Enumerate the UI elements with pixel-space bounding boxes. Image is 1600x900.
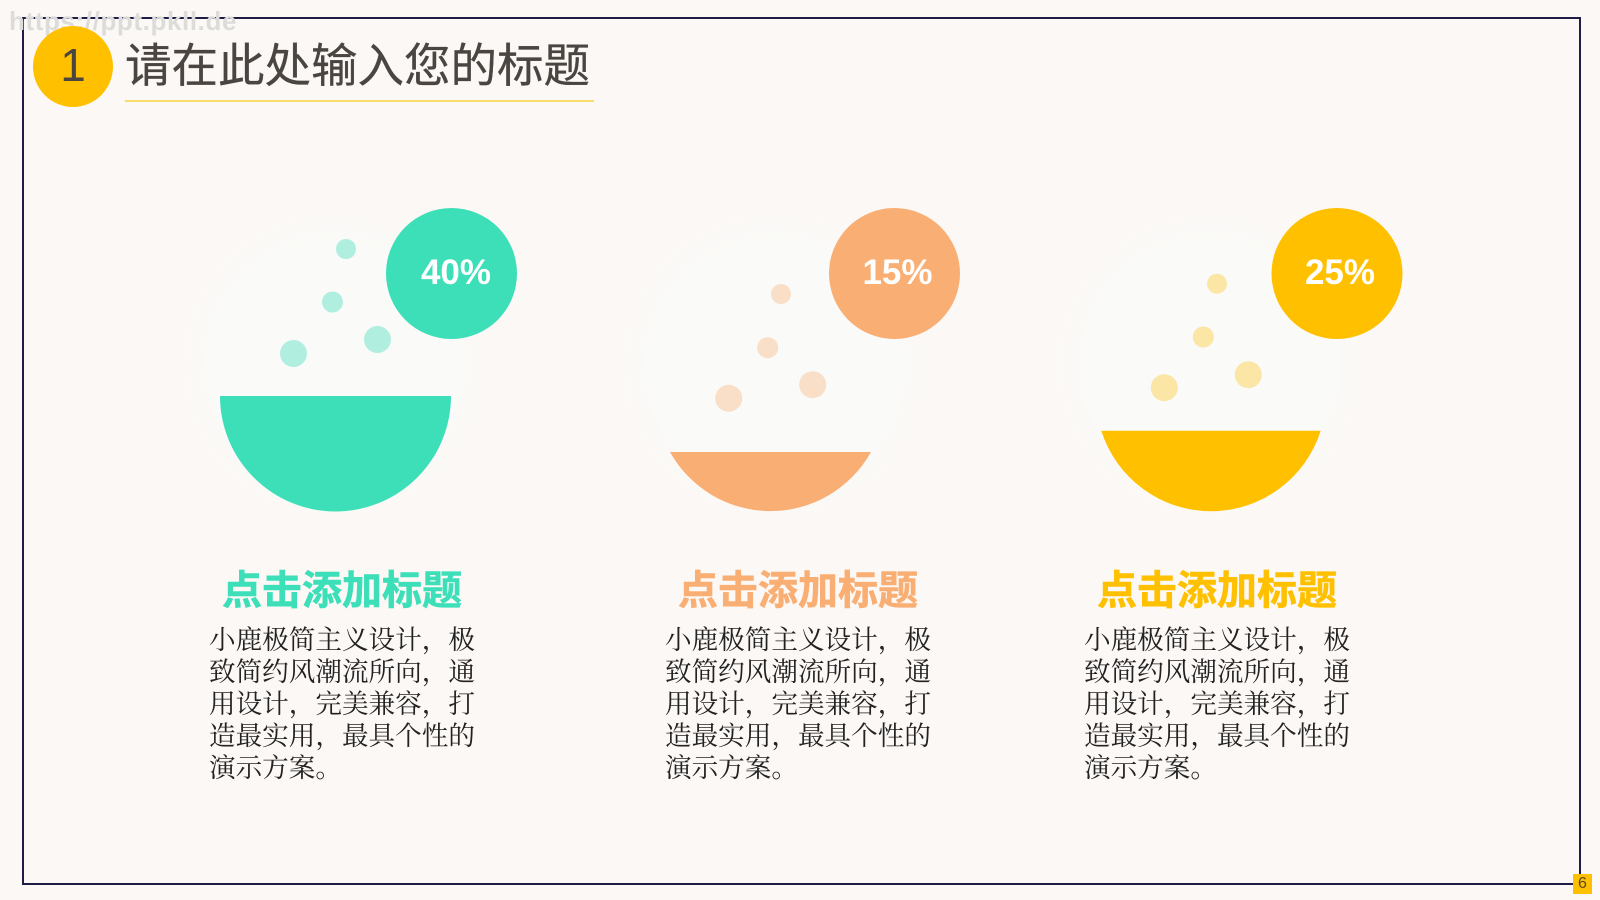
title underline xyxy=(125,100,594,102)
body text column 2: 造最实用，最具个性的 xyxy=(665,721,931,751)
body text column 1: 致简约风潮流所向，通 xyxy=(209,657,475,687)
body text column 1: 小鹿极简主义设计，极 xyxy=(209,625,475,655)
body text column 3: 致简约风潮流所向，通 xyxy=(1084,657,1350,687)
body text column 3: 造最实用，最具个性的 xyxy=(1084,721,1350,751)
body text column 3: 小鹿极简主义设计，极 xyxy=(1084,625,1350,655)
body text column 1: 用设计，完美兼容，打 xyxy=(209,689,475,719)
body text column 2: 小鹿极简主义设计，极 xyxy=(665,625,931,655)
heading column 3: 点击添加标题 xyxy=(1097,569,1337,613)
bowl chart 1: 40%: 40% xyxy=(421,253,491,292)
number badge xyxy=(33,26,113,107)
body text column 3: 用设计，完美兼容，打 xyxy=(1084,689,1350,719)
bowl chart 3: 25%: 25% xyxy=(1305,253,1375,292)
body text column 2: 演示方案。 xyxy=(665,753,798,783)
watermark: https://ppt.pkll.de xyxy=(9,6,237,36)
body text column 1 xyxy=(209,625,475,783)
bowl chart 2: 15%: 15% xyxy=(862,253,933,292)
body text column 1: 造最实用，最具个性的 xyxy=(209,721,475,751)
body text column 3: 演示方案。 xyxy=(1084,753,1217,783)
bowl chart 3: 25% xyxy=(1101,208,1402,511)
body text column 2: 致简约风潮流所向，通 xyxy=(665,657,931,687)
heading column 1: 点击添加标题 xyxy=(222,569,462,613)
page number: 6 xyxy=(1578,875,1587,892)
body text column 2: 用设计，完美兼容，打 xyxy=(665,689,931,719)
number badge: 1 xyxy=(60,39,86,91)
body text column 3 xyxy=(1084,625,1350,783)
heading column 2: 点击添加标题 xyxy=(678,569,918,613)
body text column 2 xyxy=(665,625,931,783)
title: 请在此处输入您的标题 xyxy=(125,40,590,92)
body text column 1: 演示方案。 xyxy=(209,753,342,783)
bowl chart 2: 15% xyxy=(670,208,960,511)
bowl chart 1: 40% xyxy=(220,208,517,511)
page number xyxy=(1573,874,1592,894)
